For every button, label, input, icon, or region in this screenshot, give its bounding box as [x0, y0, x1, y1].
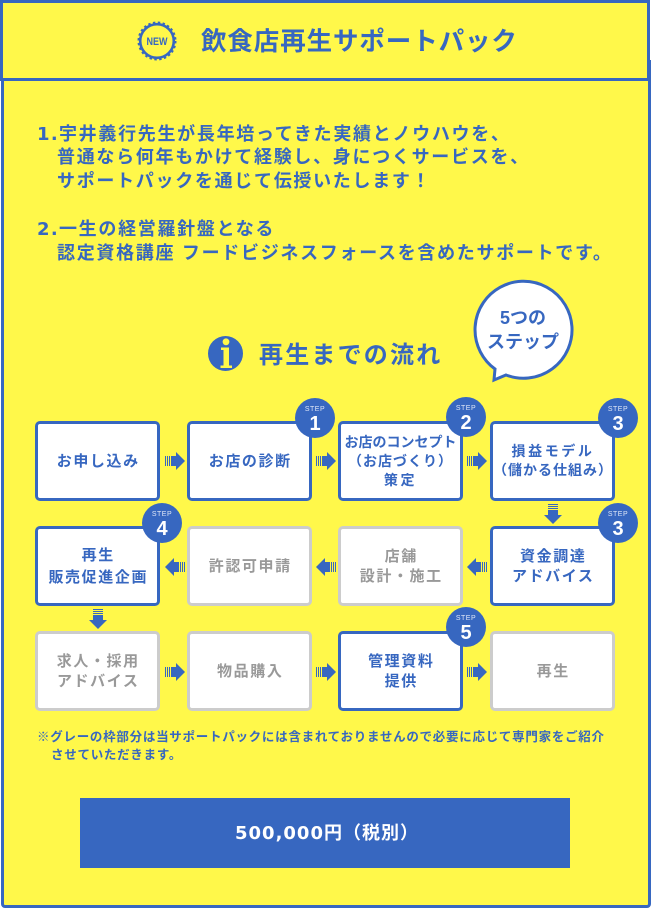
badge: step 5: STEP	[456, 615, 476, 622]
arrow: down 2	[89, 609, 107, 629]
arrow: right 3	[467, 452, 487, 470]
step box: sales promotion: 販売促進企画	[48, 568, 148, 586]
step box: sales promotion: 再生	[82, 546, 115, 564]
arrow: right 1	[165, 452, 185, 470]
badge: step 3 second	[598, 503, 638, 543]
step box: permit	[187, 526, 312, 606]
text block: point 1: 1.宇井義行先生が長年培ってきた実績とノウハウを、	[37, 124, 511, 145]
step box: recruiting	[35, 631, 160, 711]
speech bubble: five steps: 5つの	[500, 308, 546, 328]
step box: funding: 資金調達	[520, 548, 586, 564]
badge: step 3	[598, 398, 638, 438]
title: 飲食店再生サポートパック	[201, 28, 518, 56]
step box: funding: アドバイス	[512, 568, 595, 584]
step box: concept: 策定	[384, 472, 417, 488]
footnote: させていただきます。	[51, 748, 182, 762]
badge: step 2: 2	[460, 412, 472, 434]
speech bubble: five steps	[474, 280, 574, 382]
badge: step 3: 3	[612, 413, 624, 435]
text block: point 2: 2.一生の経営羅針盤となる	[37, 219, 275, 240]
price bar	[80, 798, 570, 868]
step box: profit model	[490, 421, 615, 501]
step box: rebirth	[490, 631, 615, 711]
arrow: left 1	[467, 558, 487, 576]
badge: step 1: STEP	[305, 406, 325, 413]
icon: new badge: NEW	[146, 36, 168, 48]
step box: store design: 設計・施工	[360, 568, 443, 584]
arrow: right 6	[467, 663, 487, 681]
arrow: right 5	[316, 663, 336, 681]
arrow: left 3	[165, 558, 185, 576]
arrow: right 4	[165, 663, 185, 681]
badge: step 3 second: STEP	[608, 511, 628, 518]
text block: point 1: サポートパックを通じて伝授いたします！	[57, 171, 431, 191]
badge: step 4	[142, 503, 182, 543]
icon: information	[208, 336, 243, 371]
text block: point 2	[37, 219, 613, 263]
step box: recruiting: 求人・採用	[57, 652, 140, 670]
price bar: 500,000円（税別）	[235, 823, 419, 844]
badge: step 2: STEP	[456, 405, 476, 412]
badge: step 1	[295, 398, 335, 438]
step box: permit: 許認可申請	[209, 558, 292, 574]
arrow: down 1	[544, 504, 562, 524]
step box: application: お申し込み	[57, 452, 140, 470]
step box: profit model: 損益モデル	[512, 443, 594, 459]
step box: management materials: 提供	[385, 672, 418, 690]
badge: step 2	[446, 397, 486, 437]
badge: step 5	[446, 607, 486, 647]
badge: step 4: 4	[156, 518, 168, 540]
step box: purchasing	[187, 631, 312, 711]
step box: management materials: 管理資料	[368, 652, 434, 670]
step box: rebirth: 再生	[537, 662, 570, 680]
step box: concept: お店のコンセプト	[344, 434, 456, 450]
step box: sales promotion	[35, 526, 160, 606]
badge: step 5: 5	[460, 622, 472, 644]
speech bubble: five steps: ステップ	[487, 332, 559, 352]
header band	[0, 0, 650, 81]
text block: point 1	[37, 124, 530, 191]
flow heading: 再生までの流れ	[259, 342, 442, 369]
step box: management materials	[338, 631, 463, 711]
text block: point 1: 普通なら何年もかけて経験し、身につくサービスを、	[57, 147, 530, 167]
step box: profit model: （儲かる仕組み）	[493, 462, 613, 478]
badge: step 3 second: 3	[612, 518, 624, 540]
step box: funding	[490, 526, 615, 606]
step box: diagnosis: お店の診断	[209, 452, 292, 470]
step box: concept	[338, 421, 463, 501]
icon: new badge	[138, 22, 176, 60]
text block: point 2: 認定資格講座 フードビジネスフォースを含めたサポートです。	[57, 243, 613, 263]
footnote: ※グレーの枠部分は当サポートパックには含まれておりませんので必要に応じて専門家をご紹介	[37, 730, 605, 744]
step box: concept: （お店づくり）	[348, 452, 453, 468]
step box: store design: 店舗	[385, 548, 418, 564]
footnote	[37, 730, 605, 762]
step box: recruiting: アドバイス	[57, 672, 140, 690]
badge: step 1: 1	[309, 413, 321, 435]
step box: purchasing: 物品購入	[217, 662, 283, 680]
step box: diagnosis	[187, 421, 312, 501]
badge: step 3: STEP	[608, 406, 628, 413]
arrow: left 2	[316, 558, 336, 576]
step box: store design	[338, 526, 463, 606]
step box: application	[35, 421, 160, 501]
badge: step 4: STEP	[152, 511, 172, 518]
arrow: right 2	[316, 452, 336, 470]
